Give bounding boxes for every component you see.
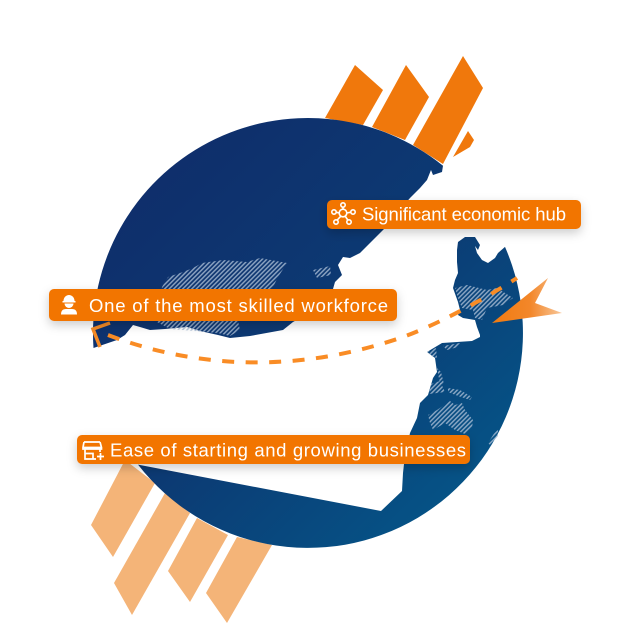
flight path start marker [93,323,110,347]
callout: skilled workforce [49,289,397,321]
callout: significant economic hub [327,200,581,229]
hatched region: southeast asia [427,343,472,400]
light orange bars, bottom left [91,460,272,623]
icon: network [332,203,355,224]
hatched region: australia [428,401,473,434]
label text: Significant economic hub [362,204,566,224]
label text: One of the most skilled workforce [89,295,388,316]
dashed flight path [108,278,517,362]
hatched region: small island north [313,266,331,278]
paper plane arrow [492,278,562,323]
icon: worker with hard hat [61,295,77,314]
label text: Ease of starting and growing businesses [110,440,466,460]
hatched region: central continent [157,258,287,336]
callout: ease of starting businesses [77,435,470,464]
globe: right and lower landmass [138,237,523,548]
globe: upper left landmass [93,118,443,348]
icon: store with plus [83,442,104,460]
hatched region: south asia [455,285,513,320]
orange bars, top right [325,56,483,164]
hatched region: small island east [488,430,498,446]
